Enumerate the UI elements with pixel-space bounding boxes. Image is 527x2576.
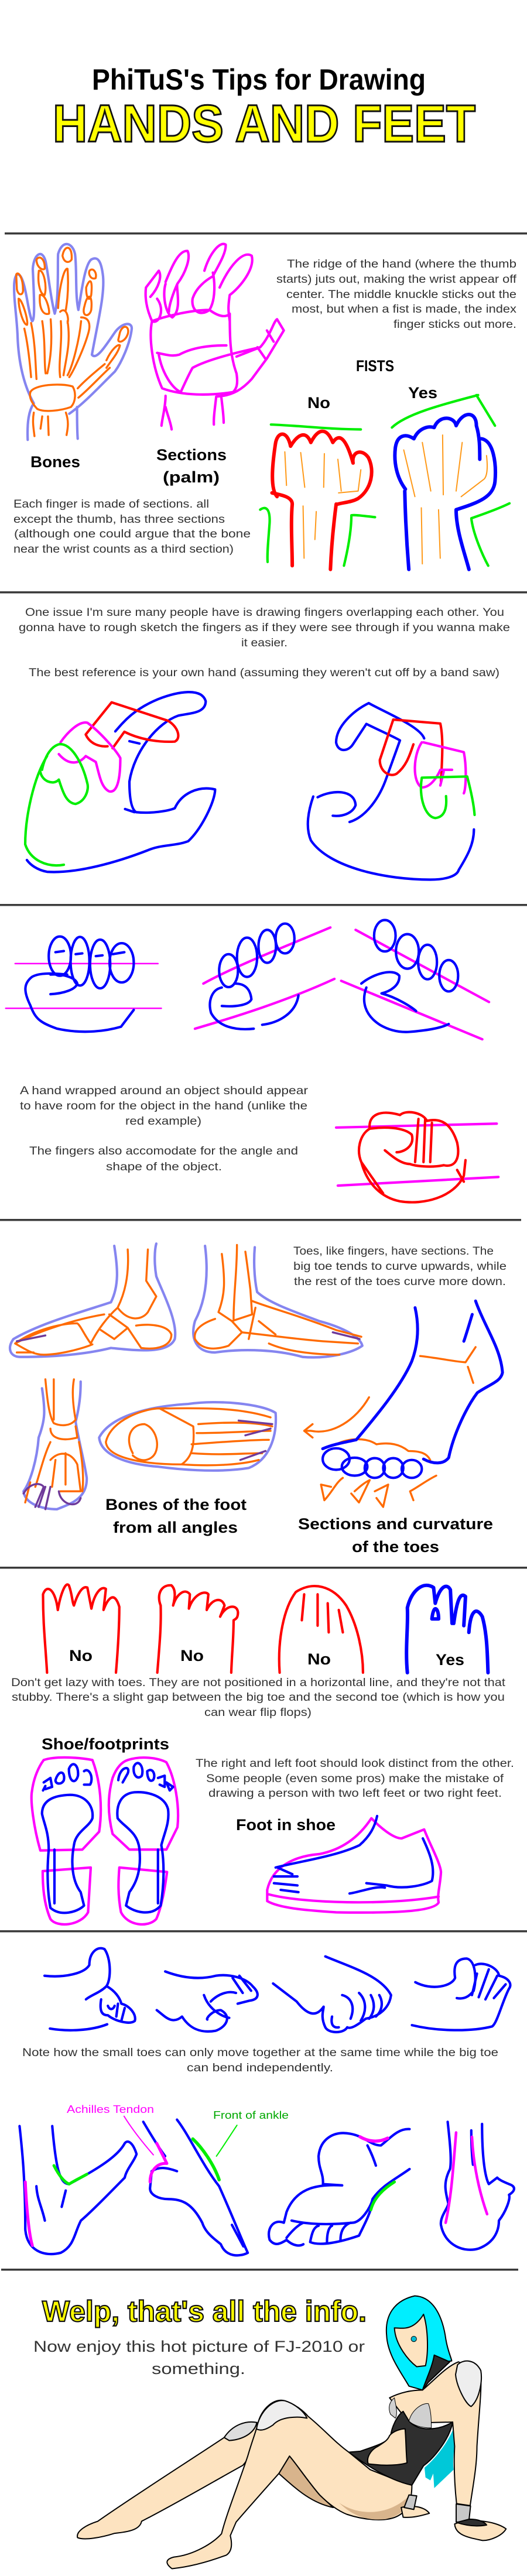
text block: closing note: Now enjoy this hot picture of FJ-2010 or [33, 2338, 365, 2355]
illustration: grip tilted down [341, 920, 489, 1039]
illustration: fist no [260, 424, 375, 570]
illustration: ankle flexed [19, 2126, 136, 2254]
panel: closing [33, 2295, 506, 2569]
panel: toe movement and ankle [19, 1948, 514, 2255]
text block: ridge of the hand: The ridge of the hand (where the thumb [287, 258, 516, 270]
far leg [77, 2422, 259, 2539]
text block: toes have sections: Toes, like fingers, have sections. The [293, 1245, 494, 1258]
label: Sections (palm): (palm) [163, 468, 220, 486]
title: HANDS AND FEET [53, 95, 475, 153]
illustration: overlapping fingers right [308, 703, 474, 879]
panel: overlapping fingers [19, 607, 510, 879]
text block: hand wrapped around an object: The fingers also accomodate for the angle and [29, 1145, 298, 1157]
heading: shoe/footprints: Shoe/footprints [42, 1735, 169, 1753]
heading: welp: Welp, that's all the info. [42, 2295, 367, 2328]
label: Sections (palm): Sections [156, 446, 227, 464]
title: PhiTuS's Tips for Drawing [92, 63, 426, 96]
illustration: ankle from behind [441, 2122, 514, 2250]
label: bones of the foot: from all angles [113, 1519, 238, 1536]
text block: ridge of the hand: finger sticks out more. [393, 318, 516, 331]
text block: finger sections: (although one could argue that the bone [14, 528, 251, 540]
label: Yes: Yes [436, 1651, 464, 1669]
illustration: toes yes [406, 1585, 488, 1673]
label: sections and curvature [298, 1515, 493, 1556]
text block: don't get lazy with toes: Don't get lazy with toes. They are not positioned in a horizontal line, and they're not that [11, 1677, 506, 1689]
label: Bones: Bones [30, 453, 80, 471]
text block: left and right foot [196, 1758, 514, 1800]
text block: finger sections: near the wrist counts as a third section) [13, 543, 234, 556]
figure body [167, 2296, 506, 2569]
illustration: shoe footprints [32, 1758, 178, 1924]
label: No: No [180, 1647, 204, 1664]
text block: left and right foot: Some people (even some pros) make the mistake of [206, 1773, 504, 1785]
illustration: toes no, lazy lines [279, 1586, 363, 1673]
text block: ridge of the hand: center. The middle knuckle sticks out the [286, 289, 516, 301]
illustration: foot bones side view left [10, 1244, 175, 1357]
illustration: toe sections and curvature [304, 1301, 502, 1507]
text block: finger sections: except the thumb, has three sections [13, 513, 225, 526]
illustration: overlapping fingers left [25, 692, 215, 872]
text block: ridge of the hand [276, 258, 517, 331]
label: Sections (palm) [156, 446, 227, 486]
text block: small toes note [22, 2047, 498, 2074]
illustration: grip level [6, 937, 162, 1032]
text block: overlapping fingers: One issue I'm sure many people have is drawing fingers overlapping each other. You [25, 607, 504, 619]
illustration: foot toe movement 2 [157, 1971, 258, 2032]
illustration: toes no, flat [43, 1584, 119, 1673]
illustration: foot toe movement 4 [412, 1958, 510, 2030]
text block: small toes note: can bend independently. [187, 2062, 333, 2074]
label: Achilles Tendon: Achilles Tendon [67, 2104, 154, 2115]
text block: hand wrapped around an object: shape of the object. [106, 1161, 222, 1173]
text block: don't get lazy with toes [11, 1677, 506, 1719]
panel: foot bones [10, 1244, 507, 1556]
text block: left and right foot: drawing a person with two left feet or two right feet. [208, 1787, 502, 1800]
label: sections and curvature: Sections and curvature [298, 1515, 493, 1533]
text block: finger sections: Each finger is made of sections. all [13, 498, 209, 511]
text block: overlapping fingers: gonna have to rough sketch the fingers as if they were see through if you wanna make [19, 622, 510, 634]
text block: toes have sections [293, 1245, 507, 1288]
illustration: toes no, stubby [158, 1585, 238, 1673]
illustration: foot toe movement 1 [45, 1948, 135, 2030]
label: No: No [69, 1647, 93, 1664]
illustration: fist yes [392, 395, 509, 570]
text block: overlapping fingers: it easier. [241, 637, 288, 649]
label: Yes: Yes [408, 384, 437, 402]
illustration: foot in shoe [267, 1816, 441, 1913]
text block: hand wrapped around an object: to have room for the object in the hand (unlike the [20, 1100, 307, 1112]
label: bones of the foot [105, 1496, 247, 1536]
illustration: foot bones front view [23, 1379, 87, 1509]
text block: toes have sections: big toe tends to curve upwards, while [293, 1260, 507, 1273]
text block: left and right foot: The right and left foot should look distinct from the other. [196, 1758, 514, 1770]
label: sections and curvature: of the toes [352, 1538, 439, 1556]
illustration: seated figure [77, 2296, 506, 2569]
text block: hand wrapped around an object: red example) [125, 1115, 201, 1128]
illustration: ankle extended [124, 2116, 248, 2255]
text block: hand wrapped around an object [20, 1085, 309, 1173]
illustration: ankle from front [269, 2129, 409, 2245]
text block: don't get lazy with toes: can wear flip flops) [204, 1707, 312, 1719]
heading: foot in shoe: Foot in shoe [236, 1816, 336, 1834]
text block: small toes note: Note how the small toes can only move together at the same time while the big toe [22, 2047, 498, 2059]
text block: ridge of the hand: starts) juts out, making the wrist appear off [276, 273, 517, 286]
text block: hand wrapped around an object: A hand wrapped around an object should appear [20, 1085, 309, 1097]
label: bones of the foot: Bones of the foot [105, 1496, 247, 1513]
text block: overlapping fingers: The best reference is your own hand (assuming they weren't cut off by a band saw) [29, 667, 499, 679]
text block: closing note: something. [152, 2360, 245, 2378]
text block: ridge of the hand: most, but when a fist is made, the index [292, 303, 517, 316]
heading: fists: FISTS [356, 357, 394, 375]
panel: hand bones and sections [13, 244, 517, 570]
label: No: No [307, 394, 330, 412]
text block: closing note [33, 2338, 365, 2378]
title [53, 63, 475, 153]
illustration: red grip example [336, 1112, 498, 1203]
text block: don't get lazy with toes: stubby. There's a slight gap between the big toe and the second toe (which is how you [12, 1691, 505, 1704]
illustration: foot bones sole view [99, 1402, 276, 1471]
panel: gripping hands [6, 920, 498, 1203]
illustration: grip tilted up [195, 924, 334, 1029]
illustration: hand sections [146, 244, 284, 429]
text block: overlapping fingers [19, 607, 510, 679]
label: Front of ankle: Front of ankle [213, 2109, 289, 2121]
text block: toes have sections: the rest of the toes curve more down. [294, 1276, 506, 1288]
panel: toes good and bad [11, 1584, 514, 1924]
illustration: foot toe movement 3 [273, 1957, 391, 2032]
illustration: hand bones [14, 244, 132, 440]
text block: finger sections [13, 498, 251, 556]
label: No: No [307, 1650, 331, 1668]
illustration: foot bones side view right [193, 1245, 362, 1358]
